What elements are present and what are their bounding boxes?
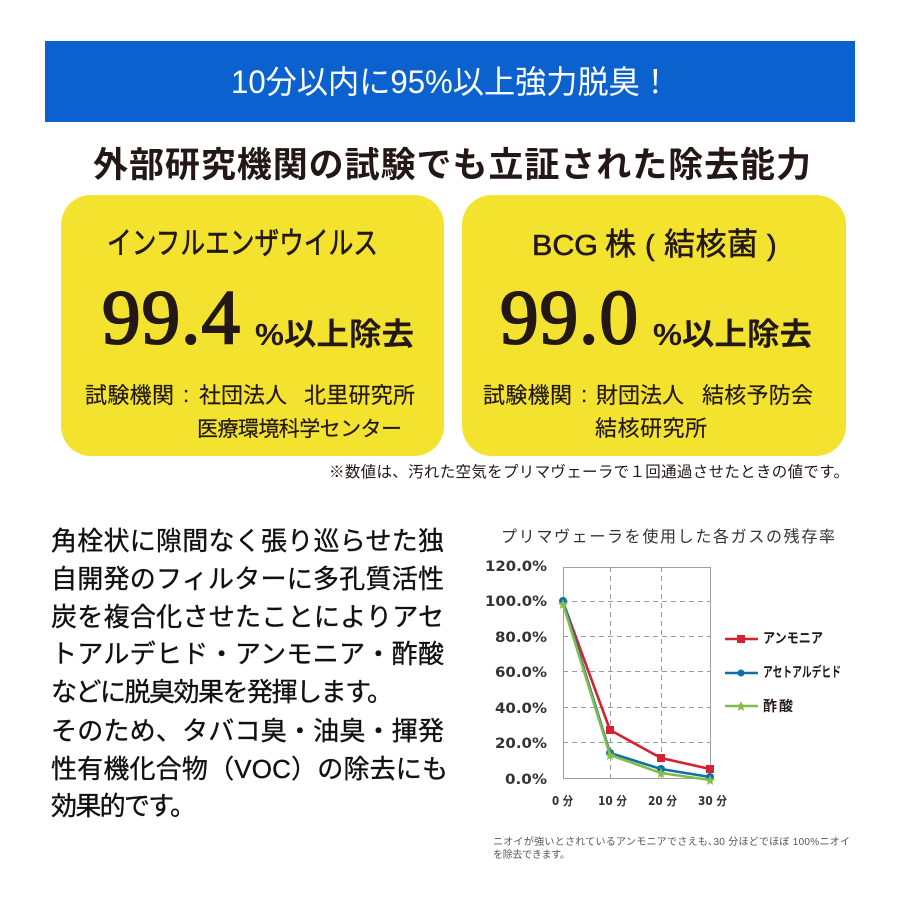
- testing institution: 試験機関: [85, 383, 174, 408]
- x axis labels: [552, 794, 727, 808]
- legend: [725, 630, 841, 714]
- stat: 99.0 percent: %以上除去: [653, 317, 812, 352]
- heading: 外部研究機関の試験でも立証された除去能力: [93, 146, 811, 185]
- x axis labels: 30 分: [698, 794, 727, 808]
- stat: 99.0 percent: [500, 274, 812, 360]
- panel heading: BCG: (: [645, 230, 655, 262]
- y axis labels: 80.0%: [495, 630, 547, 646]
- testing institution: [85, 382, 415, 441]
- y axis labels: 0.0%: [505, 772, 547, 788]
- y axis labels: 120.0%: [485, 559, 547, 575]
- testing institution: 北里研究所: [304, 383, 415, 408]
- chart caption: [493, 835, 850, 861]
- panel heading: BCG: 株: [605, 227, 636, 262]
- x axis labels: 10 分: [598, 794, 627, 808]
- y axis labels: 60.0%: [495, 665, 547, 681]
- panel heading: BCG: BCG: [532, 230, 598, 262]
- stat: 99.4 percent: %以上除去: [255, 317, 414, 352]
- x axis labels: 0 分: [552, 794, 573, 808]
- banner: [45, 41, 855, 122]
- body text: 効果的です。: [51, 791, 196, 821]
- chart: residual rate by gas: [485, 528, 850, 861]
- panel: influenza: [61, 195, 444, 456]
- y axis labels: 40.0%: [495, 701, 547, 717]
- stat: 99.0 percent: 99.0: [500, 274, 638, 360]
- body text: そのため、タバコ臭・油臭・揮発: [51, 716, 444, 746]
- stat: 99.4 percent: [102, 274, 414, 360]
- y axis labels: 20.0%: [495, 736, 547, 752]
- body text: トアルデヒド・アンモニア・酢酸: [51, 639, 444, 669]
- chart caption: ニオイが強いとされているアンモニアでさえも､30 分ほどでほぼ 100%ニオイ: [493, 835, 850, 848]
- body text: [51, 526, 448, 821]
- body text: 自開発のフィルターに多孔質活性: [51, 564, 444, 594]
- testing institution: :: [581, 382, 587, 407]
- series: acetaldehyde: [559, 597, 714, 781]
- y axis labels: 100.0%: [485, 594, 547, 610]
- legend: acetaldehyde: アセトアルデヒド: [763, 664, 841, 680]
- body text: などに脱臭効果を発揮します。: [51, 677, 393, 707]
- testing institution: 試験機関: [483, 383, 572, 408]
- x axis labels: 20 分: [648, 794, 677, 808]
- testing institution: 結核予防会: [702, 383, 813, 408]
- testing institution: 財団法人: [596, 383, 684, 408]
- banner: 10分以内に95%以上強力脱臭！: [231, 64, 671, 100]
- testing institution: 医療環境科学センター: [197, 418, 402, 441]
- panel heading: BCG: ): [767, 230, 777, 262]
- chart title: プリマヴェーラを使用した各ガスの残存率: [501, 528, 835, 546]
- stat: 99.4 percent: 99.4: [102, 274, 240, 360]
- panel heading: BCG: 結核菌: [664, 227, 758, 262]
- panel: BCG: [462, 195, 846, 456]
- panel heading: influenza: インフルエンザウイルス: [107, 226, 378, 261]
- series: acetic acid: [558, 599, 715, 785]
- chart caption: を除去できます。: [493, 848, 570, 861]
- body text: 炭を複合化させたことによりアセ: [51, 602, 444, 632]
- y axis labels: [485, 559, 547, 788]
- body text: 角栓状に隙間なく張り巡らせた独: [51, 526, 444, 556]
- testing institution: :: [183, 382, 189, 407]
- footnote: ※数値は、汚れた空気をプリマヴェーラで１回通過させたときの値です。: [329, 463, 849, 481]
- testing institution: 結核研究所: [595, 416, 707, 441]
- panel heading: BCG: [532, 227, 777, 262]
- testing institution: [483, 382, 813, 441]
- plot area: [563, 567, 710, 778]
- body text: 性有機化合物（VOC）の除去にも: [51, 754, 448, 784]
- testing institution: 社団法人: [199, 383, 287, 408]
- legend: acetic acid: 酢酸: [763, 698, 793, 714]
- legend: ammonia: アンモニア: [763, 630, 823, 646]
- series: ammonia: [563, 602, 714, 773]
